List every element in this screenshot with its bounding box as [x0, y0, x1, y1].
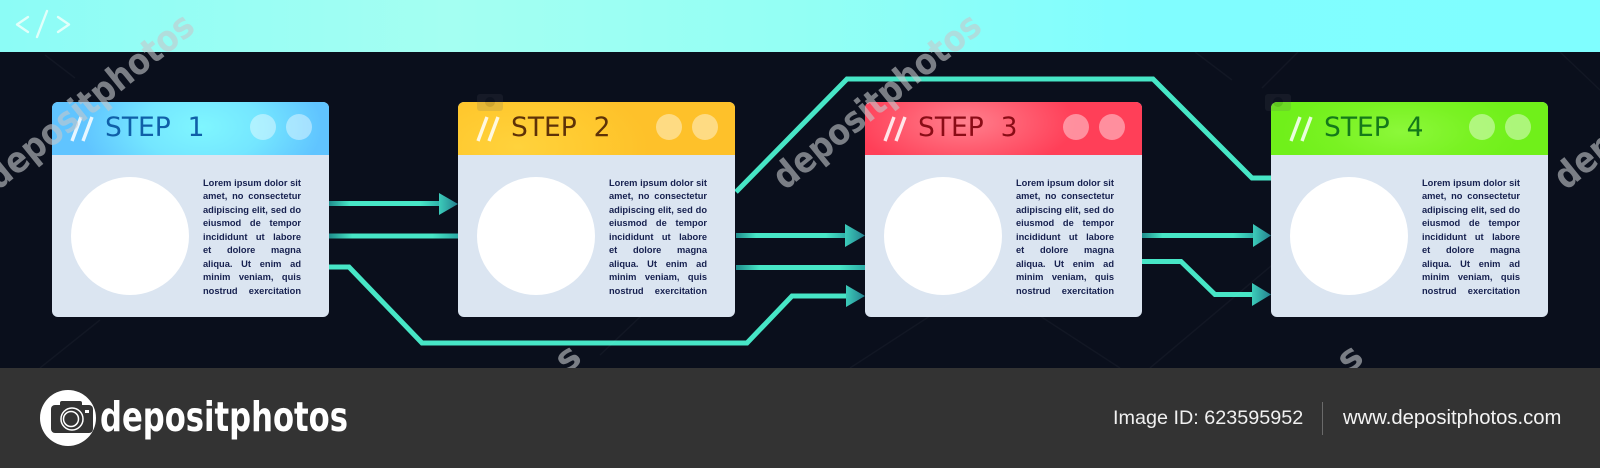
divider	[1322, 402, 1323, 435]
text block: adipiscing elit, sed do	[1016, 205, 1114, 215]
arrow: step 1 to step 2 upper	[329, 193, 458, 215]
header: step 1	[52, 102, 329, 155]
text block: Lorem ipsum dolor sit	[609, 178, 707, 188]
text block: incididunt ut labore	[203, 232, 301, 242]
text block: et dolore magna	[609, 245, 707, 255]
line: step 2 to step 4	[736, 79, 1271, 192]
arrow: step 3 to step 4 lower	[1142, 262, 1271, 306]
text block: eiusmod de tempor	[1422, 218, 1520, 228]
image placeholder	[477, 177, 595, 295]
watermark camera: right	[1265, 94, 1291, 111]
header: step 2	[458, 102, 735, 155]
text block: nostrud exercitation	[203, 286, 301, 296]
text block: Lorem ipsum dolor sit	[203, 178, 301, 188]
top banner	[0, 0, 1600, 52]
text block: incididunt ut labore	[609, 232, 707, 242]
header: step 3	[865, 102, 1142, 155]
watermark overlay	[0, 5, 1600, 368]
text block	[609, 178, 708, 296]
text block: amet, no consectetur	[1016, 191, 1114, 201]
text block: et dolore magna	[1016, 245, 1114, 255]
line: step 2 to step 3 lower	[736, 265, 865, 270]
image placeholder	[1290, 177, 1408, 295]
text block: incididunt ut labore	[1422, 232, 1520, 242]
footer bar	[0, 368, 1600, 468]
header: step 1: STEP 1	[105, 112, 204, 143]
logo icon: camera	[40, 390, 96, 446]
text block: adipiscing elit, sed do	[203, 205, 301, 215]
text block: et dolore magna	[203, 245, 301, 255]
arrow: step 3 to step 4 upper	[1142, 224, 1271, 247]
text block	[203, 178, 302, 296]
text block: aliqua. Ut enim ad	[1016, 259, 1114, 269]
text block: adipiscing elit, sed do	[1422, 205, 1520, 215]
panel: step 4	[1271, 102, 1548, 317]
image placeholder	[884, 177, 1002, 295]
text block: et dolore magna	[1422, 245, 1520, 255]
text block: Lorem ipsum dolor sit	[1422, 178, 1520, 188]
text block: eiusmod de tempor	[1016, 218, 1114, 228]
text block: incididunt ut labore	[1016, 232, 1114, 242]
line: step 1 to step 2 lower	[329, 234, 458, 238]
text block: aliqua. Ut enim ad	[203, 259, 301, 269]
text block: nostrud exercitation	[1422, 286, 1520, 296]
header: step 3: STEP 3	[918, 112, 1017, 143]
arrow: step 1 to step 3	[329, 267, 865, 343]
text block: aliqua. Ut enim ad	[609, 259, 707, 269]
header: step 4	[1271, 102, 1548, 155]
text block	[1016, 178, 1114, 296]
image id: Image ID: 623595952	[1113, 407, 1303, 429]
panel: step 3	[865, 102, 1142, 317]
image placeholder	[71, 177, 189, 295]
text block	[1422, 178, 1520, 296]
text block: minim veniam, quis	[609, 272, 707, 282]
header: step 4: STEP 4	[1324, 112, 1423, 143]
panel: step 1	[52, 102, 329, 317]
arrow: step 2 to step 3	[736, 224, 865, 247]
icon: code brackets	[16, 10, 70, 38]
website url: www.depositphotos.com	[1343, 407, 1561, 429]
text block: amet, no consectetur	[1422, 191, 1520, 201]
text block: nostrud exercitation	[1016, 286, 1114, 296]
text block: Lorem ipsum dolor sit	[1016, 178, 1114, 188]
watermark camera: centre	[477, 94, 503, 111]
text block: nostrud exercitation	[609, 286, 707, 296]
text block: minim veniam, quis	[1422, 272, 1520, 282]
text block: minim veniam, quis	[1016, 272, 1114, 282]
text block: adipiscing elit, sed do	[609, 205, 707, 215]
text block: minim veniam, quis	[203, 272, 301, 282]
logo wordmark: depositphotos	[100, 393, 348, 441]
text block: amet, no consectetur	[609, 191, 707, 201]
text block: eiusmod de tempor	[203, 218, 301, 228]
header: step 2: STEP 2	[511, 112, 610, 143]
text block: aliqua. Ut enim ad	[1422, 259, 1520, 269]
text block: amet, no consectetur	[203, 191, 301, 201]
logo	[40, 390, 348, 446]
panel: step 2	[458, 102, 735, 317]
text block: eiusmod de tempor	[609, 218, 707, 228]
